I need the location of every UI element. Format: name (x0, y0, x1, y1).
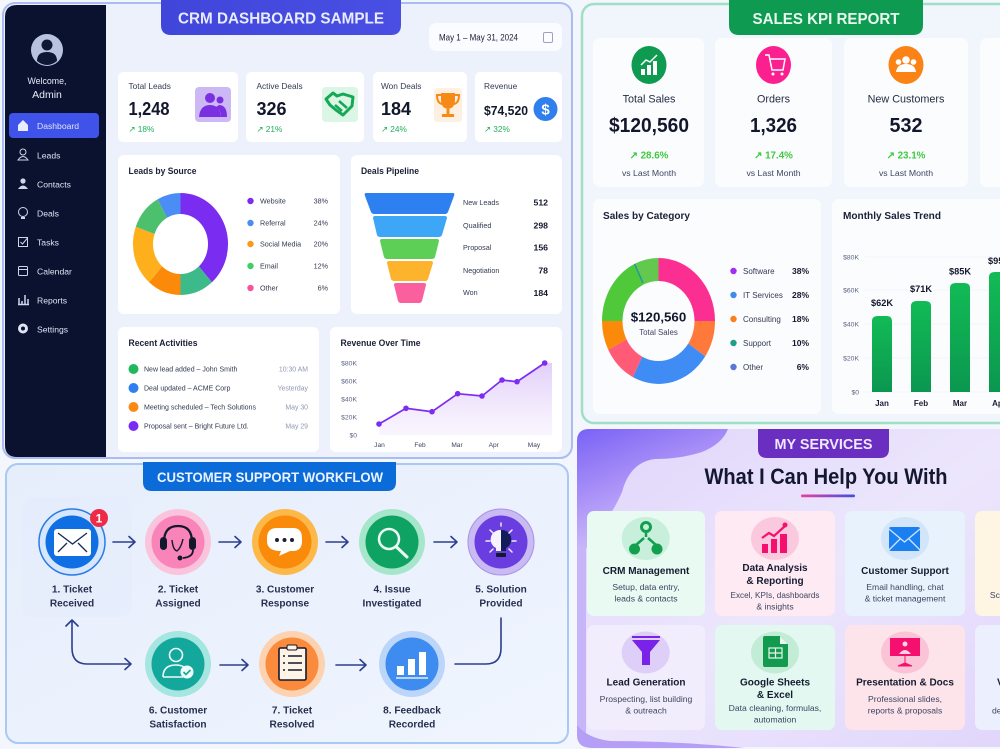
step 5: Solution Provided (468, 509, 534, 610)
service card: Google Sheets & Excel: & Excel (757, 690, 793, 701)
welcome text: Admin (32, 89, 62, 101)
KPI card: Total Sales: $120,560 (609, 115, 689, 137)
panel: Monthly Sales Trend (832, 199, 1000, 414)
donut chart: leads (133, 193, 228, 295)
KPI card: Won Deals: ↗ 24% (381, 124, 407, 134)
step 5: Solution Provided: 5. Solution (475, 584, 527, 596)
pipeline stage values: Won (463, 288, 478, 297)
bar chart: monthly sales: $40K (843, 322, 859, 328)
legend: sales: 38% (792, 266, 809, 276)
arrow: loop back to step 1 and on to step 6 (66, 620, 131, 670)
nav item: Settings: Settings (37, 324, 68, 334)
arrow: 4 to 5 (434, 536, 457, 548)
KPI card: Total Sales: Total Sales (623, 94, 676, 106)
service card: Customer Support (845, 511, 965, 616)
title: Customer support workflow: CUSTOMER SUPPORT WORKFLOW (157, 469, 384, 485)
arrow: 6 to 7 (220, 660, 248, 670)
icon: spreadsheet (751, 632, 799, 674)
KPI card: Orders: vs Last Month (746, 168, 801, 178)
pipeline stage values: Negotiation (463, 266, 499, 275)
nav item: Tasks (18, 238, 59, 248)
bar chart: monthly sales: $20K (843, 356, 859, 362)
activity list: May 30 (285, 404, 308, 412)
panel: Revenue Over Time: Revenue Over Time (340, 338, 420, 349)
bar chart: monthly sales: $0 (851, 390, 859, 396)
panel: Recent Activities: Recent Activities (128, 338, 198, 349)
activity list (128, 364, 309, 431)
arrow: 7 to 8 (336, 660, 366, 670)
panel: Leads by Source: Leads by Source (128, 166, 196, 177)
KPI card: Orders: ↗ 17.4% (754, 150, 793, 162)
service card: clipped scheduling (975, 511, 1000, 616)
panel: Deals Pipeline: Deals Pipeline (361, 166, 419, 177)
step 4: Issue Investigated (359, 509, 425, 610)
title: CRM dashboard sample: CRM DASHBOARD SAMPLE (178, 10, 384, 28)
KPI card: New Customers: 532 (890, 115, 922, 137)
legend: sales (730, 266, 809, 372)
arrow: 2 to 3 (219, 536, 241, 548)
nav item: Settings (20, 324, 68, 334)
step 8: Feedback Recorded: Recorded (389, 720, 435, 730)
sidebar (5, 5, 106, 457)
nav item: Tasks: Tasks (37, 238, 59, 248)
step 6: Customer Satisfaction (145, 631, 211, 730)
KPI card: Total Leads: Total Leads (128, 81, 171, 91)
KPI card: Orders: Orders (757, 94, 791, 106)
service card: Customer Support: & ticket management (865, 594, 946, 604)
service card: Data Analysis & Reporting: Data Analysis (742, 563, 808, 574)
legend: sales: 10% (792, 338, 809, 348)
nav item: Calendar: Calendar (37, 266, 72, 276)
KPI card: Revenue (475, 72, 562, 142)
heading: What I Can Help You With: What I Can Help You With (704, 464, 948, 489)
panel: Customer support workflow (6, 462, 568, 743)
service card: Lead Generation: Prospecting, list building (600, 694, 693, 704)
connector: 5 to 8 (455, 618, 501, 664)
bar chart: monthly sales: $62K (871, 298, 893, 308)
step 1: Ticket Received: 1 (96, 512, 103, 526)
KPI card: New Customers: New Customers (868, 94, 945, 106)
KPI card: Orders (715, 38, 832, 187)
legend: leads: 6% (318, 284, 329, 292)
service card: CRM Management: Setup, data entry, (612, 582, 680, 592)
service card: Presentation & Docs: Presentation & Docs (856, 678, 954, 688)
line chart: revenue: $80K (341, 360, 357, 368)
pipeline stage values: 512 (534, 198, 548, 208)
title: My services (758, 429, 889, 458)
pipeline stage values: 298 (534, 220, 548, 230)
legend: sales: 28% (792, 290, 809, 300)
arrow: 3 to 4 (326, 536, 348, 548)
step 7: Ticket Resolved: Resolved (270, 720, 314, 730)
icon: funnel (622, 632, 670, 674)
nav item: Leads (18, 149, 60, 160)
pipeline stage values: Proposal (463, 243, 492, 252)
step 3: Customer Response: 3. Customer (256, 584, 314, 596)
service card: Google Sheets & Excel: Google Sheets (740, 678, 810, 688)
KPI card: New Customers: ↗ 23.1% (887, 150, 926, 162)
KPI card: Total Sales: vs Last Month (622, 168, 676, 178)
line chart: revenue: $40K (341, 396, 357, 404)
activity list: Meeting scheduled – Tech Solutions (144, 404, 256, 412)
panel: Leads by Source (118, 155, 340, 314)
funnel chart (365, 193, 454, 303)
KPI card: New Customers: vs Last Month (879, 168, 933, 178)
KPI card: New Customers (844, 38, 968, 187)
service card: clipped virtual assistance (975, 625, 1000, 730)
icon: CRM network (622, 517, 670, 560)
line chart: revenue: Mar (451, 442, 463, 449)
bar chart: monthly sales: Mar (953, 399, 967, 408)
activity list: New lead added – John Smith (144, 366, 237, 374)
step 6: Customer Satisfaction: Satisfaction (149, 720, 207, 730)
KPI card: Active Deals: 326 (256, 99, 287, 119)
KPI card: Won Deals (373, 72, 467, 142)
service card: Data Analysis & Reporting (715, 511, 835, 616)
legend: leads: Website (260, 196, 286, 206)
legend: sales: Consulting (743, 315, 781, 324)
step 4: Issue Investigated: 4. Issue (373, 584, 411, 596)
bar chart: monthly sales: Feb (914, 399, 928, 408)
icon: chart (751, 517, 799, 560)
pipeline stage values: 156 (534, 242, 548, 252)
title: My services: MY SERVICES (774, 437, 873, 453)
step 3: Customer Response (252, 509, 318, 610)
title: Sales KPI report: SALES KPI REPORT (752, 11, 900, 28)
step 8: Feedback Recorded: 8. Feedback (383, 706, 441, 716)
line chart: revenue (341, 360, 552, 449)
line chart: revenue: Jan (374, 442, 385, 449)
KPI card: Total Leads (118, 72, 238, 142)
line chart: revenue: Feb (414, 442, 426, 449)
panel: Monthly Sales Trend: Monthly Sales Trend (843, 210, 941, 222)
line chart: revenue: Apr (489, 442, 500, 449)
bar chart: monthly sales: Jan (875, 399, 889, 408)
donut chart: sales (602, 258, 715, 384)
service card: Google Sheets & Excel: automation (754, 714, 796, 724)
step 1: Ticket Received (39, 509, 108, 610)
legend: sales: Support (743, 339, 772, 348)
step 1: Ticket Received: 1. Ticket (52, 584, 93, 596)
heading underline (801, 494, 855, 497)
KPI card: Total Sales (593, 38, 704, 187)
nav item: Reports (18, 295, 67, 306)
icon: people (195, 87, 231, 122)
legend: leads: 24% (314, 218, 329, 228)
service card: Presentation & Docs: Professional slides, (868, 694, 942, 704)
KPI card: Won Deals: Won Deals (381, 81, 421, 91)
icon: admin avatar (31, 34, 63, 66)
panel: Sales KPI report (582, 0, 1000, 423)
icon: mail (881, 517, 929, 560)
nav item: Deals: Deals (37, 208, 59, 218)
title: Customer support workflow (143, 462, 396, 491)
KPI card: Total Leads: 1,248 (128, 99, 170, 119)
nav item: Dashboard active (9, 113, 99, 138)
legend: leads: Social Media (260, 240, 301, 248)
service card: Lead Generation: Lead Generation (607, 678, 685, 688)
KPI card: Active Deals: ↗ 21% (256, 124, 283, 134)
KPI card: Active Deals (246, 72, 364, 142)
welcome text (28, 76, 66, 101)
nav item: Dashboard active: Dashboard (37, 121, 79, 131)
service card: Data Analysis & Reporting: & insights (756, 602, 794, 612)
legend: leads: 12% (314, 262, 329, 270)
legend: leads: Email (260, 262, 278, 270)
pipeline stage values: Qualified (463, 221, 491, 230)
step 6: Customer Satisfaction: 6. Customer (149, 706, 207, 716)
icon: handshake (322, 87, 358, 122)
step 8: Feedback Recorded (379, 631, 445, 730)
line chart: revenue: May (528, 442, 541, 449)
nav item: Contacts (18, 178, 71, 190)
bar chart: monthly sales: $60K (843, 288, 859, 294)
legend: leads (247, 196, 329, 292)
legend: sales: Other (743, 363, 763, 372)
legend: sales: Software (743, 267, 775, 276)
service card: CRM Management (587, 511, 705, 616)
step 2: Ticket Assigned: Assigned (155, 598, 201, 610)
legend: sales: 18% (792, 314, 809, 324)
panel: Recent Activities (118, 327, 319, 452)
line chart: revenue: $0 (349, 432, 357, 440)
pipeline stage values: New Leads (463, 198, 499, 207)
activity list: 10:30 AM (279, 366, 308, 374)
service card: Lead Generation (587, 625, 705, 730)
pipeline stage values: 184 (534, 288, 548, 298)
service card: Customer Support: Customer Support (861, 566, 950, 577)
panel: Sales by Category (593, 199, 821, 414)
KPI card: Revenue: ↗ 32% (484, 124, 510, 134)
step 7: Ticket Resolved (259, 631, 325, 730)
icon: growth chart (632, 46, 666, 84)
KPI card: Revenue: Revenue (484, 81, 518, 91)
welcome text: Welcome, (28, 76, 66, 86)
panel: CRM dashboard (3, 0, 572, 458)
pipeline stage values: 78 (538, 266, 548, 276)
icon: shopping cart (756, 46, 791, 84)
bar chart: monthly sales: $71K (910, 284, 932, 294)
service card: Data Analysis & Reporting: Excel, KPIs, dashboards (730, 590, 820, 600)
KPI card: Won Deals: 184 (381, 99, 411, 119)
activity list: Deal updated – ACME Corp (144, 386, 230, 392)
KPI card: Revenue: $74,520 (484, 103, 528, 118)
legend: leads: Other (260, 284, 279, 292)
legend: sales: 6% (797, 362, 809, 372)
step 4: Issue Investigated: Investigated (363, 598, 421, 610)
line chart: revenue: $20K (341, 414, 357, 422)
KPI card: Total Leads: ↗ 18% (128, 124, 155, 134)
step 2: Ticket Assigned (145, 509, 211, 610)
title: Sales KPI report (729, 0, 923, 35)
activity list: Proposal sent – Bright Future Ltd. (144, 424, 249, 430)
panel: Sales by Category: Sales by Category (603, 210, 690, 222)
nav item: Calendar (18, 266, 72, 276)
bar chart: monthly sales (843, 254, 1000, 408)
legend: leads: 20% (314, 240, 329, 248)
service card: Lead Generation: & outreach (625, 706, 667, 716)
step 7: Ticket Resolved: 7. Ticket (272, 706, 313, 716)
donut center total: Total Sales (639, 328, 678, 337)
panel: Deals Pipeline (351, 155, 562, 314)
panel: Revenue Over Time (330, 327, 562, 452)
KPI card: clipped fourth (980, 38, 1000, 187)
activity list: May 29 (285, 424, 308, 430)
service card: Data Analysis & Reporting: & Reporting (746, 576, 804, 587)
step 5: Solution Provided: Provided (479, 598, 523, 610)
donut center total (631, 310, 686, 337)
icon: dollar coin: $ (541, 102, 550, 118)
service card: Customer Support: Email handling, chat (866, 582, 944, 592)
arrow: 1 to 2 (113, 536, 135, 548)
step 2: Ticket Assigned: 2. Ticket (158, 584, 199, 596)
service card: Presentation & Docs (845, 625, 965, 730)
panel: My services (577, 429, 1000, 748)
nav item: Contacts: Contacts (37, 180, 71, 190)
KPI card: Orders: 1,326 (750, 115, 797, 137)
date range selector: May 1 – May 31, 2024 (439, 32, 518, 42)
step 3: Customer Response: Response (261, 598, 310, 610)
service card: Google Sheets & Excel (715, 625, 835, 730)
donut center total: $120,560 (631, 310, 686, 324)
service card: Google Sheets & Excel: Data cleaning, formulas, (729, 703, 821, 713)
title: CRM dashboard sample (161, 0, 401, 35)
nav item: Reports: Reports (37, 296, 67, 306)
service card: CRM Management: CRM Management (603, 566, 690, 577)
nav item: Leads: Leads (37, 150, 60, 160)
legend: leads: Referral (260, 218, 286, 228)
icon: presentation (881, 632, 929, 674)
bar chart: monthly sales: $80K (843, 254, 859, 262)
activity list: Yesterday (278, 386, 309, 392)
date range selector (429, 23, 562, 51)
service card: CRM Management: leads & contacts (614, 594, 678, 604)
line chart: revenue: $60K (341, 378, 357, 386)
legend: sales: IT Services (743, 291, 783, 300)
icon: trophy (434, 88, 462, 122)
KPI card: Active Deals: Active Deals (256, 81, 303, 91)
KPI card: Total Sales: ↗ 28.6% (630, 150, 669, 162)
bar chart: monthly sales: $85K (949, 266, 971, 276)
nav item: Deals (18, 208, 59, 219)
icon: customers (888, 46, 924, 84)
pipeline stage values (463, 198, 548, 298)
service card: Presentation & Docs: reports & proposals (868, 706, 942, 716)
step 1: Ticket Received: Received (50, 598, 94, 610)
legend: leads: 38% (314, 196, 329, 206)
